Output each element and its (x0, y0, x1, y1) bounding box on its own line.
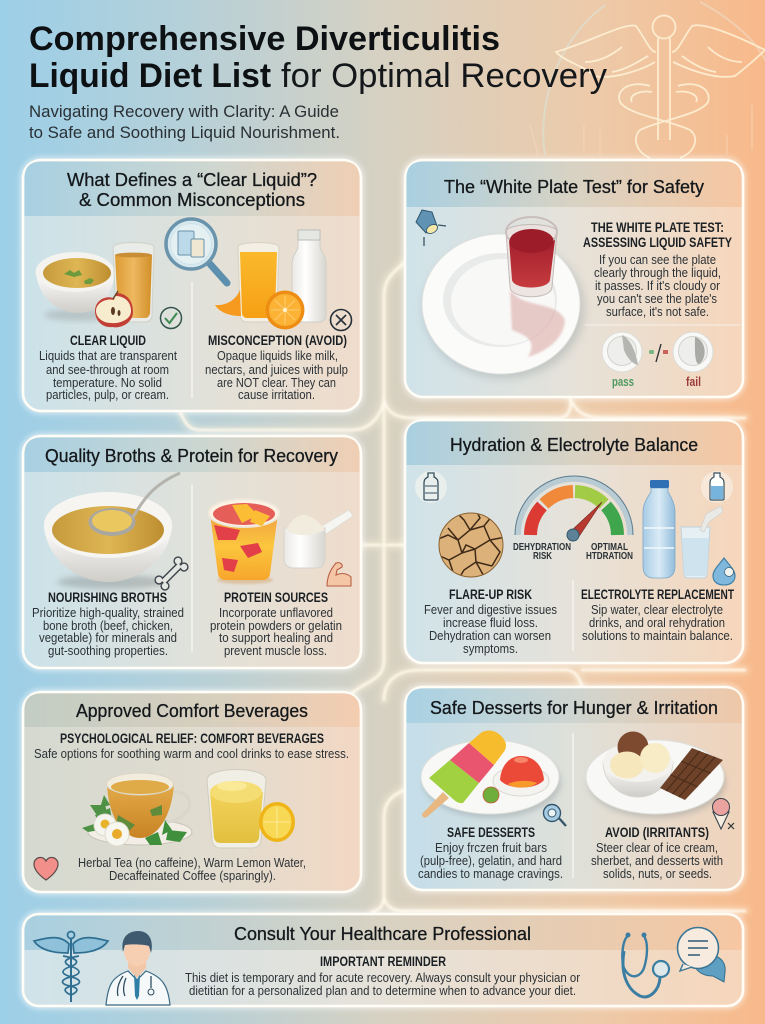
icon: chocolate bar (660, 748, 723, 800)
text: clear liquid: and see-through at room (46, 362, 169, 377)
gauge labels: OPTIMAL (591, 542, 628, 553)
text: safe desserts: Enjoy frczen fruit bars (435, 840, 547, 855)
icon: apple half (95, 291, 133, 327)
icon: ice cream bowl (603, 732, 673, 797)
label: pass: pass (612, 375, 634, 389)
text: nourishing broths: NOURISHING BROTHS (48, 590, 167, 605)
text: avoid irritants: Steer clear of ice cream, (596, 840, 718, 855)
icon: pass or fail separator (649, 344, 668, 362)
icon: pass plate (602, 332, 642, 372)
text: comfort list: Decaffeinated Coffee (sparingly). (109, 868, 276, 883)
text: comfort list (78, 855, 306, 883)
text: important reminder: dietitian for a personalized plan and to determine when to advance your diet. (189, 983, 576, 998)
text: protein sources: to support healing and (219, 630, 333, 645)
gauge labels: HTDRATION (586, 551, 633, 562)
text: white plate explanation: If you can see the plate (599, 252, 716, 267)
text: white plate explanation: ASSESSING LIQUID SAFETY (583, 235, 732, 250)
icon: flexed arm (327, 563, 351, 586)
text: protein sources: protein powders or gelatin (210, 618, 342, 633)
subtitle: to Safe and Soothing Liquid Nourishment. (29, 123, 340, 142)
heading: clear liquid: What Defines a “Clear Liquid”? (67, 169, 317, 190)
text: clear liquid: CLEAR LIQUID (70, 333, 146, 348)
text: nourishing broths: Prioritize high-quality, strained (32, 605, 184, 620)
icon: herbal tea cup (82, 773, 192, 845)
text: clear liquid (39, 333, 177, 402)
faint caduceus watermark (530, 2, 765, 158)
icon: empty bottle (415, 471, 447, 503)
text: white plate explanation: clearly through the liquid, (594, 265, 721, 280)
text: flare-up risk: FLARE-UP RISK (449, 587, 532, 602)
text: electrolyte replacement: Sip water, clear electrolyte (591, 602, 723, 617)
icon: broth bowl (36, 252, 116, 321)
text: misconception: MISCONCEPTION (AVOID) (208, 333, 347, 348)
text: important reminder (185, 954, 581, 998)
text: nourishing broths: bone broth (beef, chicken, (43, 618, 173, 633)
text: flare-up risk: symptoms. (463, 641, 518, 656)
text: electrolyte replacement: drinks, and oral rehydration (589, 615, 725, 630)
heading: desserts: Safe Desserts for Hunger & Irritation (430, 697, 718, 718)
text: protein sources: prevent muscle loss. (224, 643, 327, 658)
icon: apple juice glass (113, 242, 154, 322)
text: clear liquid: Liquids that are transparent (39, 348, 177, 363)
icon: cracked dry ground (438, 512, 504, 578)
divider (572, 733, 574, 878)
icon: electrolyte glass (681, 506, 723, 578)
divider (191, 282, 193, 398)
text: protein sources: PROTEIN SOURCES (224, 590, 328, 605)
text: electrolyte replacement (581, 587, 735, 643)
heading: broths: Quality Broths & Protein for Recovery (45, 445, 339, 466)
icon: hard candy magnifier (544, 804, 566, 826)
icon: fail plate (673, 332, 713, 372)
icon: plate left (421, 740, 561, 818)
text: flare-up risk: Dehydration can worsen (429, 628, 551, 643)
icon: gelatin cup (208, 499, 280, 584)
text: white plate explanation: THE WHITE PLATE TEST: (591, 220, 724, 235)
text: protein sources (210, 590, 342, 658)
icon: ice cream cone (712, 798, 734, 829)
heading: consult: Consult Your Healthcare Professional (234, 923, 531, 944)
heading: white plate: The “White Plate Test” for Safety (444, 176, 705, 197)
text: avoid irritants: sherbet, and desserts with (591, 853, 723, 868)
label: fail: fail (686, 375, 701, 389)
icon: gelatin dessert (493, 756, 549, 796)
illustration: white plate and glass (422, 217, 584, 378)
icon: doctor (106, 931, 170, 1005)
text: misconception: Opaque liquids like milk, (217, 348, 338, 363)
gauge labels (513, 542, 633, 562)
icon: electrolyte drop (713, 558, 735, 585)
text: flare-up risk: increase fluid loss. (443, 615, 538, 630)
text: avoid irritants: solids, nuts, or seeds. (603, 866, 712, 881)
text: avoid irritants: AVOID (IRRITANTS) (605, 825, 709, 840)
icon: oranges (215, 290, 304, 330)
title: Comprehensive Diverticulitis (29, 20, 500, 58)
heading: hydration: Hydration & Electrolyte Balance (450, 434, 698, 455)
title (29, 20, 607, 95)
icon: bone (154, 556, 189, 591)
text: misconception: cause irritation. (238, 387, 315, 402)
icon: green candy (483, 787, 499, 803)
icon: protein scoop (284, 510, 353, 568)
text: avoid irritants (591, 825, 723, 881)
text: electrolyte replacement: solutions to maintain balance. (582, 628, 733, 643)
text: important reminder: IMPORTANT REMINDER (320, 954, 446, 969)
text: white plate explanation: you can't see the plate's (597, 291, 717, 306)
text: misconception (205, 333, 348, 402)
icon: chamomile flowers (94, 814, 129, 846)
icon: broth bowl with ladle (44, 473, 180, 589)
icon: full bottle (701, 471, 733, 503)
text: safe desserts: SAFE DESSERTS (447, 825, 535, 840)
icon: stethoscope (622, 932, 669, 997)
text: clear liquid: particles, pulp, or cream. (46, 387, 169, 402)
text: safe desserts (418, 825, 563, 881)
text: protein sources: Incorporate unflavored (219, 605, 333, 620)
text: white plate explanation: surface, it's not safe. (606, 304, 709, 319)
gauge labels: DEHYDRATION (513, 542, 571, 553)
gauge labels: RISK (533, 551, 553, 562)
icon: lemon water glass (207, 770, 266, 848)
text: white plate explanation (583, 220, 732, 319)
icon: milk bottle (292, 230, 326, 322)
icon: check mark (160, 308, 182, 328)
text: safe desserts: candies to manage cravings. (418, 866, 563, 881)
text: white plate explanation: it passes. If it's cloudy or (595, 278, 721, 293)
divider (191, 485, 193, 652)
panel: white plate test (405, 160, 743, 397)
panel: hydration and electrolyte balance (405, 420, 743, 663)
title: for Optimal Recovery (281, 57, 607, 95)
icon: water bottle (643, 480, 675, 578)
subtitle: Navigating Recovery with Clarity: A Guide (29, 102, 339, 121)
icon: lamp (416, 210, 446, 246)
panel: consult your healthcare professional (23, 914, 743, 1006)
heading: comfort: Approved Comfort Beverages (76, 700, 308, 721)
icon: heart (34, 857, 58, 880)
icon: magnifying glass (166, 219, 227, 283)
divider (572, 580, 574, 651)
heading: clear liquid (67, 169, 317, 210)
icon: caduceus (34, 932, 108, 1002)
text: nourishing broths: vegetable) for minerals and (39, 630, 177, 645)
text: comfort intro: PSYCHOLOGICAL RELIEF: COMFORT BEVERAGES (60, 731, 324, 746)
title: Liquid Diet List (29, 57, 271, 95)
icon: lemon half (259, 802, 295, 842)
heading: clear liquid: & Common Misconceptions (79, 189, 305, 210)
text: comfort intro: Safe options for soothing warm and cool drinks to ease stress. (34, 746, 349, 761)
text: safe desserts: (pulp-free), gelatin, and hard (420, 853, 562, 868)
text: nourishing broths: gut-soothing properties. (48, 643, 168, 658)
text: misconception: nectars, and juices with pulp (205, 362, 348, 377)
icon: orange juice glass (238, 242, 279, 322)
subtitle (29, 102, 340, 142)
text: flare-up risk (424, 587, 557, 656)
icon: avoid mark (330, 310, 352, 330)
panel: quality broths and protein (23, 436, 361, 668)
text: comfort intro (34, 731, 349, 761)
icon: plate right (586, 740, 726, 818)
glowing connector lines (180, 262, 745, 912)
icon: popsicle (422, 730, 506, 818)
panel: what defines a clear liquid (23, 160, 361, 411)
text: important reminder: This diet is temporary and for acute recovery. Always consult your physician or (185, 970, 581, 985)
text: comfort list: Herbal Tea (no caffeine), Warm Lemon Water, (78, 855, 306, 870)
icon: chat bubbles (678, 928, 725, 982)
text: nourishing broths (32, 590, 184, 658)
text: flare-up risk: Fever and digestive issues (424, 602, 557, 617)
text: misconception: are NOT clear. They can (217, 375, 336, 390)
panel: safe desserts (405, 687, 743, 890)
chart: hydration gauge (515, 476, 633, 541)
panel: approved comfort beverages (23, 692, 361, 892)
text: clear liquid: temperature. No solid (53, 375, 162, 390)
